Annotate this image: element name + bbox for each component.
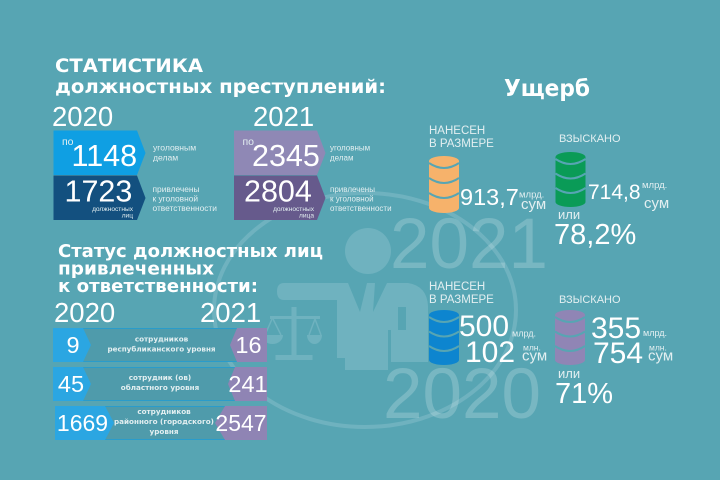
label: inflicted 2020: НАНЕСЕН <box>429 281 485 293</box>
icon: orange coin stack <box>429 156 459 213</box>
year label 2021: 2021 <box>200 297 261 328</box>
row: republican level: 16 <box>235 332 262 358</box>
label: criminal cases 2021: уголовным <box>330 144 370 152</box>
card: persons charged 2020: должностных <box>92 206 134 213</box>
label: criminal cases 2020: уголовным <box>153 142 196 152</box>
panel: crime statistics 2020: 2020 <box>52 101 113 132</box>
value: 355 billion 754 million: 355 <box>591 312 641 345</box>
row: regional level: сотрудник (ов) <box>129 373 191 382</box>
icon: blue coin stack <box>429 310 459 365</box>
value: 714,8 billion: 714,8 <box>588 181 641 204</box>
row: district level <box>55 406 267 440</box>
label: inflicted 2021: НАНЕСЕН <box>429 125 485 137</box>
panel: damage 2020: 102 <box>465 336 515 369</box>
label: charged 2021: к уголовной <box>330 194 374 204</box>
watermark: year 2021: 2021 <box>390 205 548 284</box>
label: inflicted 2021: В РАЗМЕРЕ <box>429 138 494 150</box>
panel: damage 2020: млрд. <box>512 328 536 338</box>
card: persons charged 2021 <box>234 174 326 220</box>
heading: damage: Ущерб <box>504 74 590 102</box>
panel: crime statistics 2020 <box>52 101 217 220</box>
card: persons charged 2021: должностных <box>273 206 315 213</box>
heading: status of officials: к ответственности: <box>58 276 258 297</box>
row: republican level: 9 <box>66 332 80 358</box>
panel: damage 2021: 78,2% <box>554 219 636 251</box>
watermark: emblem with official and scales <box>214 193 516 427</box>
panel: damage 2021: млрд. <box>642 180 667 191</box>
panel: damage 2021: сум <box>521 196 546 213</box>
panel: crime statistics 2021 <box>234 101 392 220</box>
year label 2020: 2020 <box>54 297 115 328</box>
card: persons charged 2020: лиц <box>122 212 133 220</box>
row: district level: 2547 <box>215 410 267 436</box>
panel: damage 2020: 754 <box>593 337 643 370</box>
panel: damage 2020: 71% <box>555 378 613 410</box>
panel: damage 2021: сум <box>644 195 669 212</box>
title: crime statistics: должностных преступлений: <box>55 76 386 98</box>
row: district level: 1669 <box>57 410 108 436</box>
heading: status of officials: привлеченных <box>58 258 214 280</box>
label: criminal cases 2021: делам <box>330 154 353 162</box>
watermark: year 2020: 2020 <box>383 355 541 434</box>
label: charged 2020: привлечены <box>152 184 200 194</box>
card: criminal cases 2021: по <box>242 136 254 148</box>
panel: damage 2021: млрд. <box>519 190 544 200</box>
row: republican level: сотрудников <box>135 334 189 344</box>
label: inflicted 2020: В РАЗМЕРЕ <box>429 294 494 306</box>
title: crime statistics: СТАТИСТИКА <box>55 55 203 77</box>
label: criminal cases 2020: делам <box>153 152 178 162</box>
card: criminal cases 2020: 1148 <box>72 139 137 173</box>
card: persons charged 2021: 2804 <box>244 174 312 208</box>
row: republican level <box>53 328 267 362</box>
heading: status of officials: Статус должностных лиц <box>58 241 323 262</box>
value: 71 percent: или <box>558 366 580 381</box>
panel: damage 2020: млн. <box>523 342 541 352</box>
row: regional level: 45 <box>58 371 84 397</box>
value: 78,2 percent: или <box>558 207 580 222</box>
card: persons charged 2021: лица <box>299 212 314 220</box>
row: regional level: областного уровня <box>121 383 200 392</box>
card: criminal cases 2020 <box>54 130 146 175</box>
card: persons charged 2020 <box>54 174 146 220</box>
panel: damage 2020: млн. <box>649 342 667 352</box>
icon: green coin stack <box>556 152 586 207</box>
panel: damage 2020: сум <box>522 348 547 364</box>
label: charged 2021: привлечены <box>330 185 375 194</box>
panel: damage 2020: млрд. <box>643 328 667 338</box>
card: persons charged 2020: 1723 <box>64 174 132 208</box>
row: district level: сотрудников <box>137 407 191 416</box>
row: district level: районного (городского) <box>114 417 214 426</box>
card: criminal cases 2021 <box>234 130 326 175</box>
label: recovered 2020: ВЗЫСКАНО <box>559 294 621 306</box>
heading: status of officials <box>58 241 323 297</box>
row: regional level: 241 <box>228 371 268 397</box>
value: 500 billion 102 million: 500 <box>459 310 509 343</box>
row: regional level <box>53 367 268 401</box>
row: republican level: республиканского уровня <box>107 344 216 354</box>
panel: crime statistics 2021: 2021 <box>253 101 314 132</box>
row: district level: уровня <box>150 427 179 436</box>
panel: damage 2020 <box>429 281 673 410</box>
icon: purple coin stack <box>555 310 585 365</box>
panel: damage 2021 <box>429 125 669 251</box>
label: charged 2020: ответственности <box>152 203 217 213</box>
title: crime statistics <box>55 55 386 98</box>
label: recovered 2021: ВЗЫСКАНО <box>559 133 621 145</box>
label: charged 2021: ответственности <box>330 204 392 213</box>
panel: damage 2020: сум <box>648 348 673 364</box>
label: charged 2020: к уголовной <box>152 194 198 204</box>
card: criminal cases 2021: 2345 <box>252 139 320 173</box>
card: criminal cases 2020: по <box>62 136 74 148</box>
value: 913,7 billion: 913,7 <box>460 184 519 210</box>
